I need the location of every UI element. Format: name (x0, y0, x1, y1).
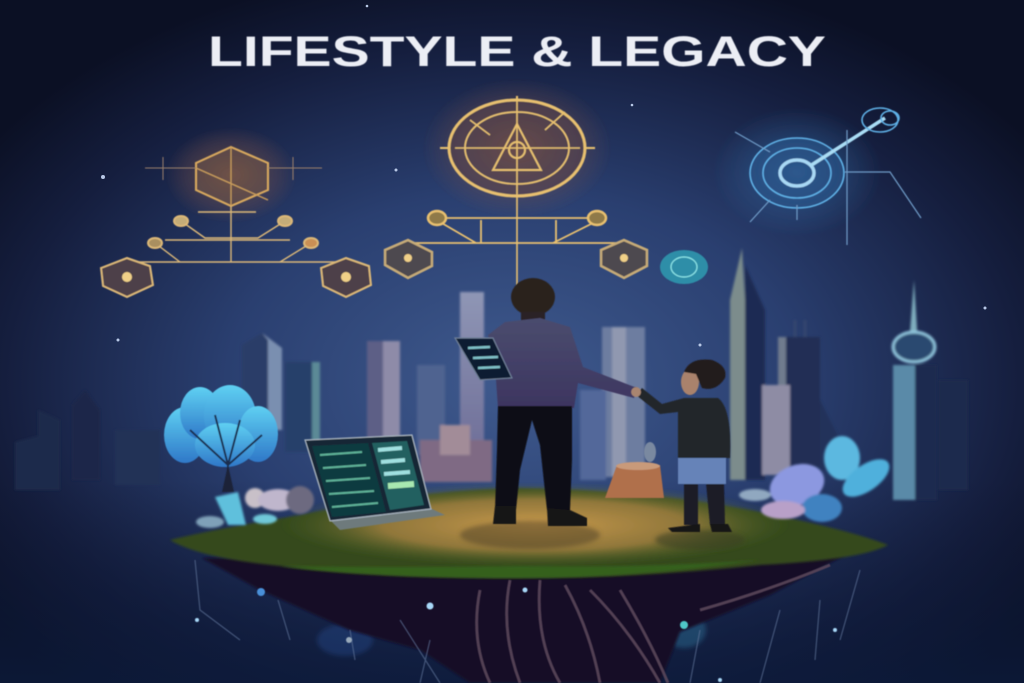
title: LIFESTYLE & LEGACY (208, 28, 826, 76)
tree stump (605, 442, 664, 498)
blue globe icon (660, 250, 708, 284)
glowing family tree centre (385, 78, 647, 285)
blue tree (164, 385, 278, 492)
crystals right (739, 436, 896, 522)
blue target chart icon (712, 107, 921, 245)
tablet (455, 338, 512, 380)
child figure (631, 360, 732, 532)
glowing family tree left (101, 127, 371, 297)
crystals left (196, 486, 314, 528)
city skyline (15, 248, 968, 500)
floating island (170, 483, 888, 683)
father figure (488, 278, 637, 526)
laptop screen (305, 435, 445, 530)
